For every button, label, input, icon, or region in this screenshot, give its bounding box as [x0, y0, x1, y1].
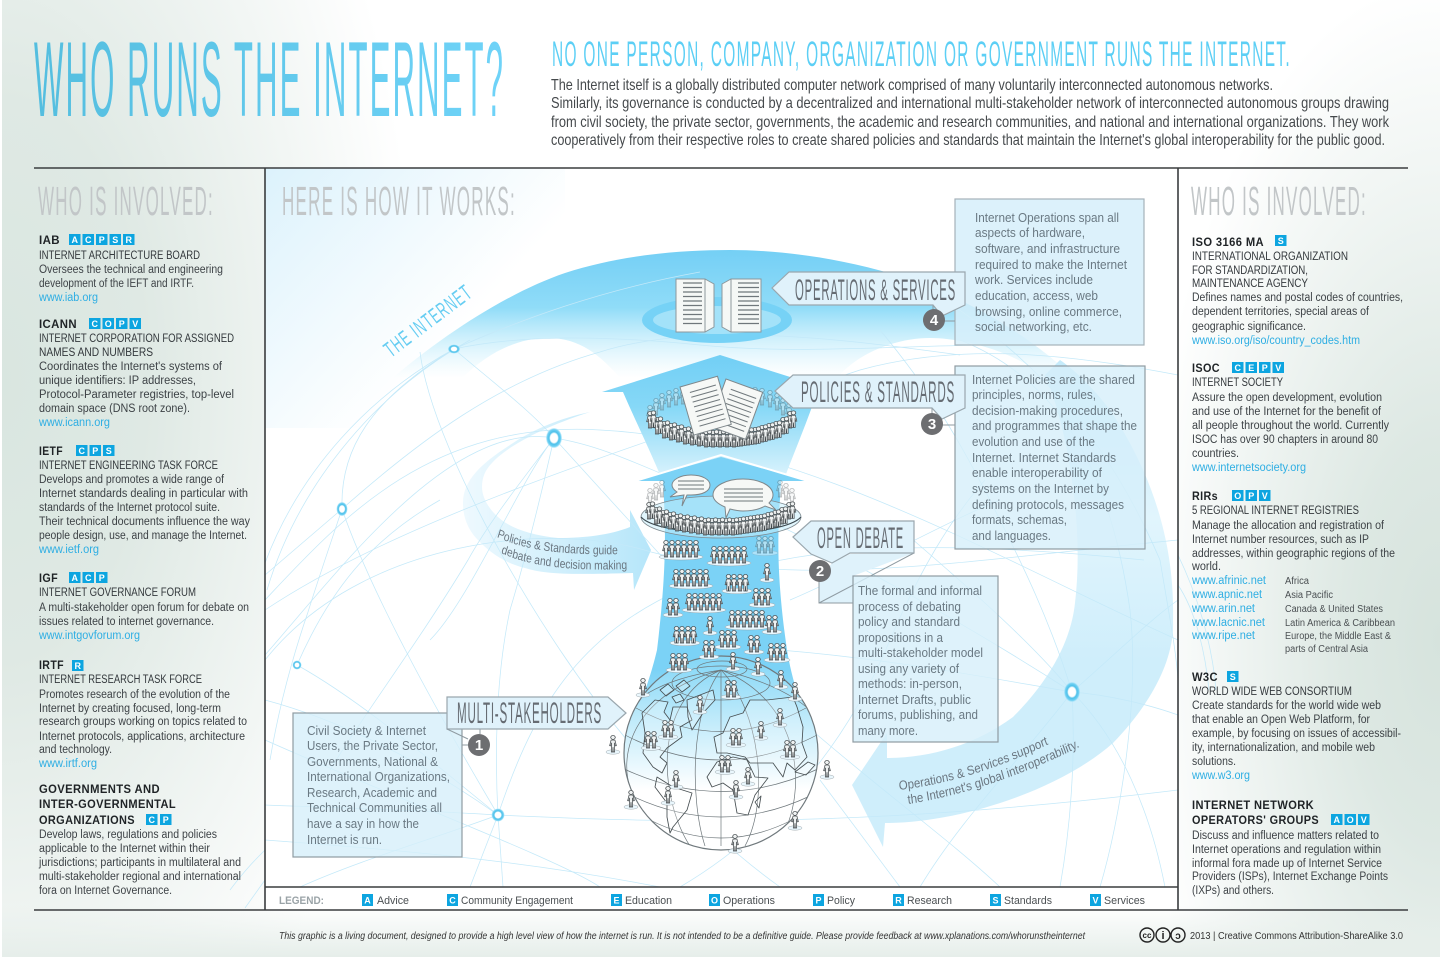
entry: internet network operators groups: informal fora made up of Internet Service: [1192, 858, 1382, 870]
callout text: operations: browsing, online commerce,: [975, 305, 1122, 319]
entry: ICANN: domain space (DNS root zone).: [39, 403, 190, 415]
tag: open debate: [793, 521, 914, 582]
entry: ICANN: NAMES AND NUMBERS: [39, 347, 153, 359]
callout text: policies: systems on the Internet by: [972, 482, 1110, 496]
entry: IAB: Oversees the technical and engineering: [39, 264, 223, 276]
entry: internet network operators groups: (IXPs) and others.: [1192, 885, 1274, 897]
entry: ISO 3166 MA: www.iso.org/iso/country_codes.htm: [1191, 335, 1360, 347]
entry: ISOC: Assure the open development, evolution: [1192, 392, 1382, 404]
entry: IETF: Their technical documents influence the way: [39, 516, 250, 528]
entry: IGF: A multi-stakeholder open forum for debate on: [39, 602, 249, 614]
entry: IETF: [38, 445, 250, 556]
entry: IGF: INTERNET GOVERNANCE FORUM: [39, 587, 196, 599]
entry: IETF: Develops and promotes a wide range of: [39, 474, 225, 486]
number badge 4: [923, 309, 945, 331]
entry: ISO 3166 MA: ISO 3166 MA: [1192, 237, 1264, 249]
people ring: policies and standards: [647, 387, 797, 447]
number badge 4: 4: [930, 312, 939, 329]
callout text: multi-stakeholders: Research, Academic and: [307, 786, 437, 800]
callout text: debate: many more.: [858, 724, 918, 738]
swoosh caption: policies guide debate: Policies & Standards guide: [498, 529, 618, 557]
entry: IAB: S: [112, 235, 118, 245]
entry: RIRs: world.: [1191, 561, 1221, 573]
entry: W3C: S: [1230, 672, 1236, 682]
footer license: 2013 | Creative Commons Attribution-ShareAlike 3.0: [1190, 931, 1403, 942]
entry: RIRs: V: [1262, 491, 1268, 501]
legend: LEGEND:: [279, 895, 324, 907]
legend item: research: R: [895, 896, 902, 906]
stakeholder groups: [606, 536, 834, 853]
legend item: education: Education: [625, 895, 672, 907]
callout text: debate: methods: in-person,: [858, 677, 962, 691]
legend item: services: [1090, 894, 1145, 907]
entry: IRTF: research groups working on topics related to: [39, 716, 247, 728]
callout text: multi-stakeholders: have a say in how the: [307, 817, 419, 831]
panel: how it works: MULTI-STAKEHOLDERS: [457, 697, 602, 730]
icon: servers: [676, 279, 761, 332]
legend item: advice: [362, 894, 409, 907]
entry: governments: jurisdictions; participants in multilateral and: [38, 857, 241, 869]
entry: internet network operators groups: Providers (ISPs), Internet Exchange Points: [1192, 871, 1388, 883]
globe: [614, 656, 833, 850]
number badge 1: 1: [475, 737, 483, 754]
callout text: operations: required to make the Internet: [975, 258, 1127, 272]
entry: W3C: ity, internationalization, and mobile web: [1192, 742, 1375, 754]
swoosh caption: operations support interoperability: Operations & Services support: [899, 737, 1048, 792]
entry: IGF: issues related to internet governance.: [39, 616, 214, 628]
legend item: education: E: [613, 896, 620, 906]
entry: ISOC: [1191, 362, 1389, 474]
callout text: operations: software, and infrastructure: [975, 242, 1120, 256]
callout: operations and services: [955, 199, 1144, 345]
entry: internet network operators groups: V: [1361, 815, 1367, 825]
swoosh caption: operations support interoperability: the Internet's global interoperability.: [908, 742, 1079, 804]
entry: IRTF: Internet protocols, applications, architecture: [39, 731, 245, 743]
tag: policies and standards: [775, 375, 965, 435]
swoosh caption: policies guide debate: debate and decision making: [502, 546, 626, 572]
entry: IGF: C: [85, 573, 92, 583]
legend item: policy: Policy: [827, 895, 855, 907]
entry: governments: INTER-GOVERNMENTAL: [39, 799, 176, 811]
entry: IGF: [38, 572, 249, 642]
entry: ICANN: Coordinates the Internet's systems of: [39, 361, 223, 373]
entry: W3C: [1191, 671, 1401, 782]
callout text: operations: social networking, etc.: [975, 320, 1092, 334]
callout text: policies: formats, schemas,: [972, 513, 1067, 527]
continents: [642, 680, 815, 833]
entry: ISO 3166 MA: INTERNATIONAL ORGANIZATION: [1192, 251, 1348, 263]
tag: multi-stakeholders: [447, 697, 626, 756]
icon: creative commons: [1140, 928, 1185, 942]
entry: internet network operators groups: Internet operations and regulation within: [1192, 844, 1381, 856]
entry: ISO 3166 MA: MAINTENANCE AGENCY: [1192, 278, 1308, 290]
entry: internet network operators groups: OPERATORS' GROUPS: [1192, 815, 1319, 827]
entry: IRTF: [38, 660, 247, 770]
entry: ISO 3166 MA: dependent territories, special areas of: [1192, 306, 1370, 318]
entry: IAB: C: [85, 235, 92, 245]
entry: RIRs: Latin America & Caribbean: [1285, 618, 1395, 629]
entry: ISOC: countries.: [1192, 448, 1239, 460]
legend: [266, 888, 1177, 909]
legend item: advice: A: [364, 896, 371, 906]
callout text: multi-stakeholders: Internet is run.: [307, 833, 382, 847]
entry: IGF: A: [71, 573, 78, 583]
legend item: community engagement: Community Engagement: [461, 895, 573, 907]
entry: ISOC: ISOC: [1192, 363, 1220, 375]
entry: IAB: P: [99, 235, 105, 245]
panel: how it works: [230, 168, 1216, 908]
legend item: education: [611, 894, 672, 907]
entry: RIRs: Europe, the Middle East &: [1285, 631, 1391, 642]
legend item: services: V: [1092, 896, 1099, 906]
callout text: multi-stakeholders: Users, the Private Sector,: [307, 739, 438, 753]
entry: ICANN: www.icann.org: [38, 417, 110, 429]
callout text: multi-stakeholders: Governments, National &: [307, 755, 439, 769]
entry: governments: GOVERNMENTS AND: [39, 784, 160, 796]
callout text: operations: work. Services include: [974, 273, 1093, 287]
entry: RIRs: 5 REGIONAL INTERNET REGISTRIES: [1192, 505, 1359, 517]
entry: W3C: W3C: [1192, 672, 1218, 684]
entry: ICANN: ICANN: [39, 319, 77, 331]
legend item: standards: Standards: [1004, 895, 1052, 907]
entry: IETF: C: [78, 446, 85, 456]
entry: ICANN: Protocol-Parameter registries, top-level: [39, 389, 234, 401]
callout text: policies: and programmes that shape the: [972, 419, 1137, 433]
arrow: policies and standards guide debate loop: [463, 412, 651, 590]
entry: ISOC: V: [1275, 363, 1281, 373]
callout: open debate description: [819, 553, 998, 742]
callout text: operations: [974, 211, 1127, 334]
entry: ISOC: INTERNET SOCIETY: [1192, 377, 1283, 389]
entry: IGF: P: [99, 573, 105, 583]
entry: ISO 3166 MA: Defines names and postal codes of countries,: [1192, 292, 1403, 304]
entry: RIRs: RIRs: [1192, 491, 1218, 503]
entry: ISOC: www.internetsociety.org: [1191, 462, 1306, 474]
callout text: policies: evolution and use of the: [972, 435, 1095, 449]
callout text: multi-stakeholders: [307, 724, 450, 847]
entry: ISO 3166 MA: S: [1278, 236, 1284, 246]
legend item: research: Research: [907, 895, 952, 907]
entry: IAB: R: [125, 235, 132, 245]
entry: IRTF: and technology.: [39, 744, 112, 756]
entry: RIRs: [1191, 490, 1395, 655]
entry: IGF: www.intgovforum.org: [38, 630, 140, 642]
callout: policies and standards: [955, 366, 1145, 549]
panel: who is involved right: [1191, 178, 1403, 897]
panel: how it works: OPEN DEBATE: [817, 522, 904, 555]
entry: governments: C: [148, 815, 155, 825]
entry: ICANN: INTERNET CORPORATION FOR ASSIGNED: [39, 333, 234, 345]
ellipse under servers: [642, 297, 792, 343]
entry: governments: P: [163, 815, 169, 825]
entry: RIRs: P: [1248, 491, 1254, 501]
entry: W3C: www.w3.org: [1191, 770, 1250, 782]
callout text: debate: using any variety of: [858, 662, 959, 676]
entry: governments: [38, 784, 241, 897]
entry: ICANN: O: [105, 319, 112, 329]
entry: ISO 3166 MA: [1191, 235, 1403, 347]
entry: RIRs: www.lacnic.net: [1191, 617, 1266, 629]
entry: internet network operators groups: Discuss and influence matters related to: [1192, 830, 1379, 842]
number badge 3: [921, 413, 943, 435]
entry: internet network operators groups: [1192, 800, 1388, 897]
entry: W3C: Create standards for the world wide web: [1192, 700, 1381, 712]
entry: ICANN: unique identifiers: IP addresses,: [39, 375, 196, 387]
entry: governments: ORGANIZATIONS: [39, 815, 135, 827]
entry: IRTF: INTERNET RESEARCH TASK FORCE: [39, 674, 202, 686]
legend item: standards: [990, 894, 1052, 907]
icon: creative commons: cc: [1143, 931, 1152, 940]
header intro paragraph: [551, 77, 1390, 149]
callout text: operations: education, access, web: [975, 289, 1098, 303]
entry: IRTF: Internet by creating focused, long-term: [39, 703, 221, 715]
footer disclaimer: This graphic is a living document, designed to provide a high level view of how the internet is run. It is not intended to be a definitive guide. Please provide feedback at www.xplanations.com/whorunstheinternet: [279, 931, 1086, 942]
entry: ICANN: V: [132, 319, 138, 329]
entry: IAB: A: [71, 235, 78, 245]
entry: ISOC: and use of the Internet for the benefit of: [1192, 406, 1382, 418]
entry: ICANN: C: [91, 319, 98, 329]
entry: ISOC: C: [1234, 363, 1241, 373]
callout text: multi-stakeholders: Civil Society & Internet: [307, 724, 426, 738]
callout text: multi-stakeholders: International Organizations,: [307, 770, 450, 784]
callout text: debate: process of debating: [858, 600, 961, 614]
entry: internet network operators groups: INTERNET NETWORK: [1192, 800, 1314, 812]
network nodes: [292, 344, 1080, 822]
entry: RIRs: www.afrinic.net: [1191, 575, 1267, 587]
entry: RIRs: Africa: [1285, 576, 1309, 587]
entry: RIRs: addresses, within geographic regions of the: [1192, 548, 1395, 560]
entry: IRTF: Promotes research of the evolution of the: [39, 689, 230, 701]
callout text: debate: Internet Drafts, public: [858, 693, 971, 707]
entry: IAB: www.iab.org: [38, 292, 98, 304]
entry: IAB: INTERNET ARCHITECTURE BOARD: [39, 250, 200, 262]
callout text: operations: Internet Operations span all: [975, 211, 1119, 225]
number badge 2: 2: [816, 563, 824, 580]
callout text: debate: policy and standard: [858, 615, 960, 629]
callout text: debate: multi-stakeholder model: [858, 646, 983, 660]
callout text: operations: aspects of hardware,: [975, 226, 1085, 240]
entry: RIRs: www.ripe.net: [1191, 630, 1256, 642]
entry: W3C: example, by focusing on issues of accessibil-: [1192, 728, 1401, 740]
entry: ISOC: P: [1262, 363, 1268, 373]
entry: RIRs: www.arin.net: [1191, 603, 1256, 615]
number badge 1: [468, 734, 490, 756]
entry: RIRs: Internet number resources, such as IP: [1192, 534, 1369, 546]
entry: W3C: solutions.: [1192, 756, 1236, 768]
entry: internet network operators groups: O: [1347, 815, 1354, 825]
header intro paragraph: The Internet itself is a globally distributed computer network comprised of many voluntarily interconnected autonomous networks.: [551, 77, 1273, 94]
panel: how it works: OPERATIONS & SERVICES: [795, 274, 956, 307]
entry: IETF: INTERNET ENGINEERING TASK FORCE: [39, 460, 218, 472]
text: WHO IS INVOLVED:: [38, 178, 214, 224]
entry: IAB: IAB: [39, 235, 60, 247]
callout text: policies: defining protocols, messages: [972, 498, 1124, 512]
entry: ISO 3166 MA: FOR STANDARDIZATION,: [1192, 265, 1308, 277]
callout text: multi-stakeholders: Technical Communities all: [307, 801, 442, 815]
legend item: services: Services: [1104, 895, 1145, 907]
entry: IETF: people design, use, and manage the Internet.: [39, 530, 247, 542]
panel: how it works: HERE IS HOW IT WORKS:: [282, 178, 516, 224]
entry: IAB: [38, 234, 223, 304]
entry: RIRs: Asia Pacific: [1285, 590, 1333, 601]
label: the internet: THE INTERNET: [379, 279, 477, 362]
callout text: debate: [858, 584, 983, 738]
legend item: operations: O: [711, 896, 718, 906]
entry: IETF: IETF: [39, 446, 63, 458]
legend item: research: [893, 894, 952, 907]
entry: IAB: development of the IEFT and IRTF.: [39, 278, 194, 290]
panel: who is involved left: [38, 178, 250, 897]
entry: governments: Develop laws, regulations and policies: [39, 829, 217, 841]
entry: ISOC: all people throughout the world. Currently: [1192, 420, 1389, 432]
entry: ICANN: [38, 318, 234, 429]
icon: creative commons: ↄ: [1175, 931, 1181, 942]
entry: internet network operators groups: A: [1333, 815, 1340, 825]
tag: operations and services: [772, 272, 965, 331]
entry: IETF: www.ietf.org: [38, 544, 99, 556]
entry: ISO 3166 MA: geographic significance.: [1192, 321, 1306, 333]
callout text: policies: principles, norms, rules,: [972, 388, 1096, 402]
debate plate with people: [641, 480, 801, 538]
callout text: policies: [972, 373, 1137, 543]
number badge 3: 3: [928, 416, 936, 433]
legend item: community engagement: C: [449, 896, 456, 906]
entry: W3C: that enable an Open Web Platform, for: [1192, 714, 1370, 726]
callout text: debate: propositions in a: [858, 631, 943, 645]
callout text: policies: enable interoperability of: [972, 466, 1102, 480]
icon: policy documents: [680, 376, 763, 439]
callout text: policies: Internet. Internet Standards: [972, 451, 1116, 465]
legend item: policy: P: [815, 896, 822, 906]
funnel: multi-stakeholder upward flow: [602, 355, 838, 745]
frame lines: [34, 168, 1408, 910]
callout text: policies: and languages.: [972, 529, 1051, 543]
arrow: operations and services support loop: [852, 360, 1173, 847]
the internet dome: [365, 250, 1090, 403]
callout: multi-stakeholder description: [293, 713, 462, 857]
swoosh caption: policies guide debate: [498, 529, 626, 572]
entry: W3C: WORLD WIDE WEB CONSORTIUM: [1192, 686, 1352, 698]
panel: how it works: POLICIES & STANDARDS: [801, 376, 955, 409]
entry: ICANN: P: [119, 319, 125, 329]
entry: governments: multi-stakeholder regional and international: [39, 871, 241, 883]
callout text: debate: forums, publishing, and: [858, 708, 978, 722]
entry: IETF: P: [92, 446, 98, 456]
legend item: policy: [813, 894, 855, 907]
entry: RIRs: O: [1234, 491, 1241, 501]
entry: IGF: IGF: [39, 573, 58, 585]
callout text: policies: decision-making procedures,: [972, 404, 1123, 418]
legend item: operations: Operations: [723, 895, 775, 907]
entry: RIRs: Canada & United States: [1285, 604, 1383, 615]
entry: IRTF: IRTF: [39, 660, 64, 672]
entry: IETF: standards of the Internet protocol suite.: [39, 502, 220, 514]
callout text: policies: Internet Policies are the shared: [972, 373, 1135, 387]
legend item: standards: S: [992, 896, 999, 906]
entry: IRTF: www.irtf.org: [38, 758, 97, 770]
icon: creative commons: i: [1161, 930, 1165, 942]
entry: IETF: S: [106, 446, 112, 456]
legend item: advice: Advice: [377, 895, 409, 907]
icon: speech bubbles: [670, 475, 776, 518]
entry: RIRs: Manage the allocation and registration of: [1192, 520, 1385, 532]
entry: RIRs: parts of Central Asia: [1285, 644, 1368, 655]
entry: governments: applicable to the Internet within their: [39, 843, 210, 855]
network lines: [230, 272, 1216, 908]
callout text: debate: The formal and informal: [858, 584, 982, 598]
entry: RIRs: www.apnic.net: [1191, 589, 1263, 601]
entry: governments: fora on Internet Governance.: [39, 885, 172, 897]
entry: IETF: Internet standards dealing in particular with: [39, 488, 248, 500]
entry: ISOC: E: [1248, 363, 1254, 373]
entry: ISOC: ISOC has over 90 chapters in around 80: [1192, 434, 1378, 446]
entry: IRTF: R: [74, 661, 81, 671]
